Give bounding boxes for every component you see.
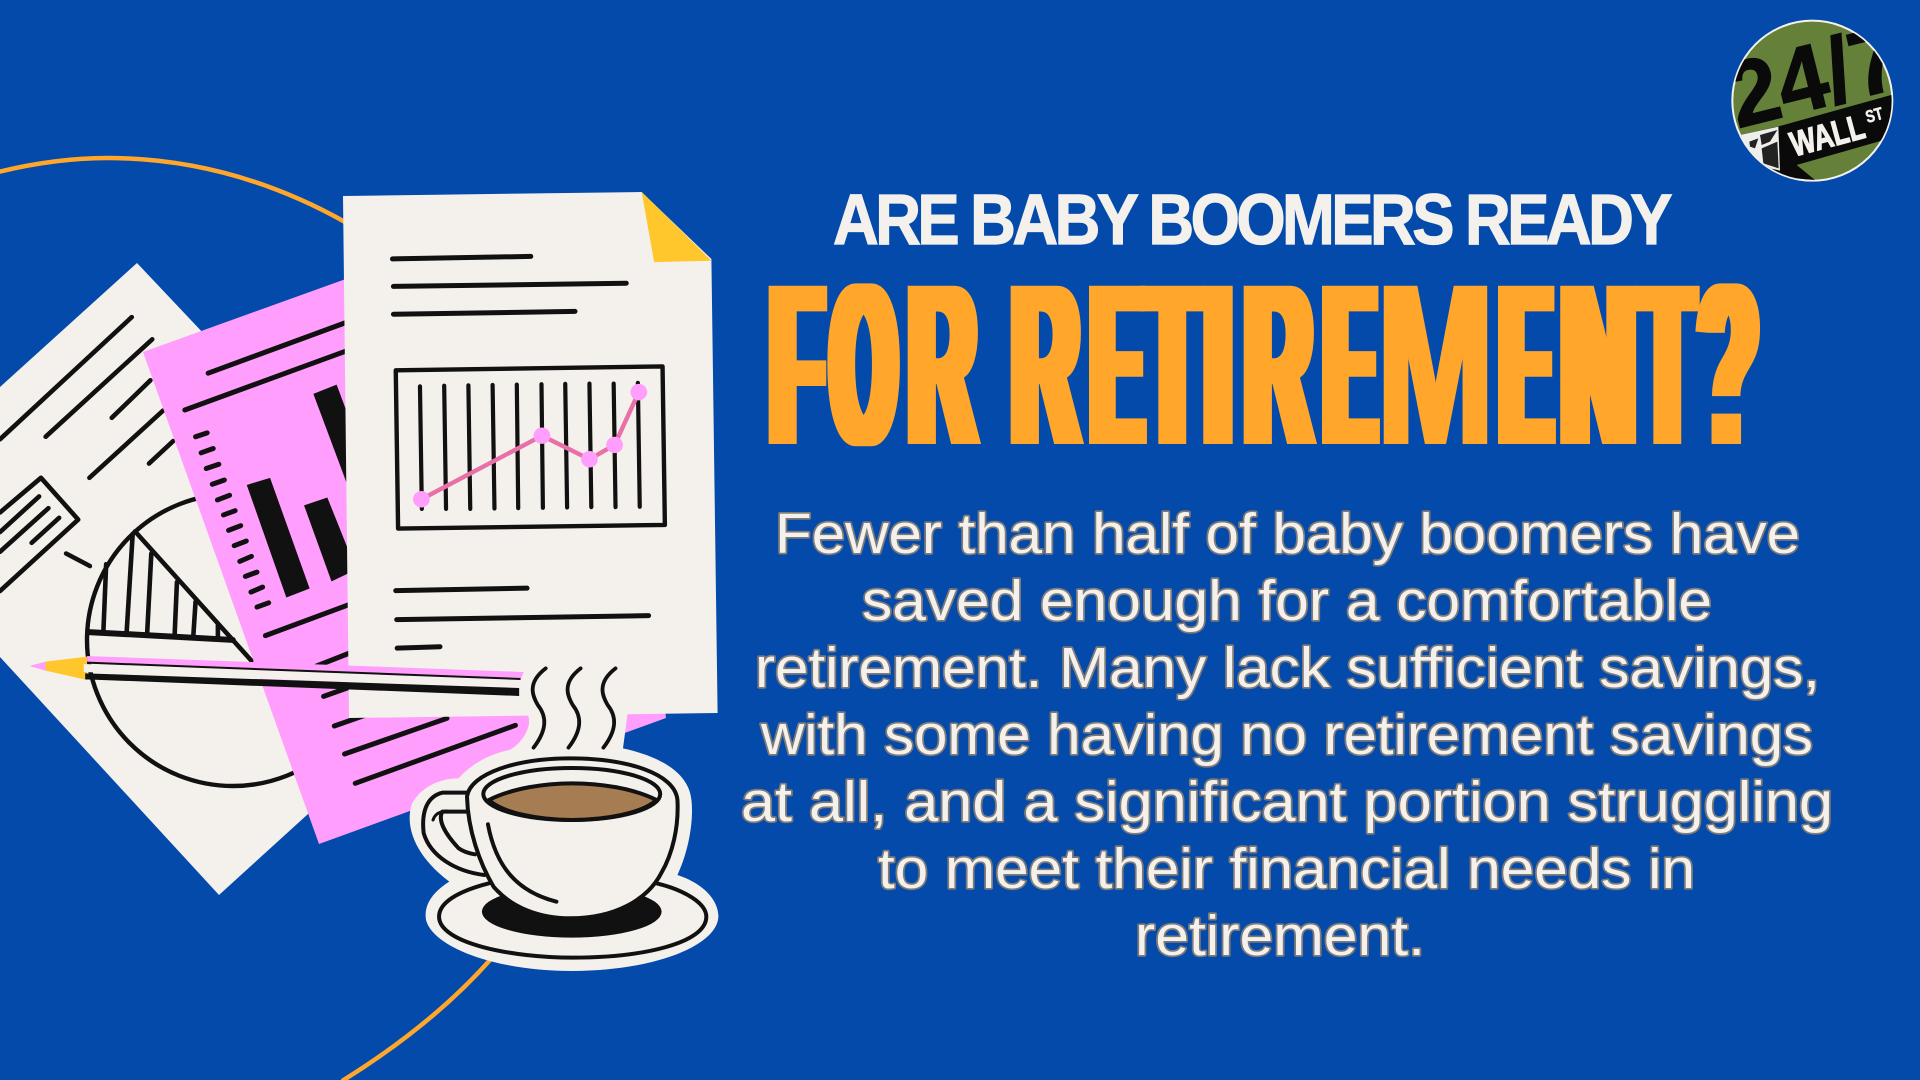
logo: 24/7 Wall St: ST [1863, 103, 1885, 127]
illustration: coffee cup on saucer [410, 668, 718, 971]
main title: T [1147, 236, 1198, 493]
logo: 24/7 Wall St [1731, 20, 1894, 182]
main title: E [1501, 236, 1551, 493]
body text block [741, 502, 1833, 968]
main title: N [1562, 236, 1634, 493]
illustration: pencil [29, 656, 524, 696]
main title: T [1642, 236, 1692, 493]
main title: F [771, 236, 822, 493]
body text block: at all, and a significant portion struggling [741, 770, 1833, 834]
icon: folded corner [642, 192, 711, 262]
logo: 24/7 Wall St: 24/7 [1717, 5, 1911, 148]
main title: E [1325, 236, 1375, 493]
illustration: pink document with bar chart [143, 200, 666, 844]
body text block: Fewer than half of baby boomers have [775, 502, 1800, 566]
body text block: retirement. [1135, 904, 1425, 968]
illustration: front document with line chart [343, 192, 718, 718]
body text block: saved enough for a comfortable [862, 569, 1712, 633]
main title: I [1206, 236, 1230, 493]
main title: E [1092, 236, 1142, 493]
main title: O [832, 236, 896, 493]
main title: R [909, 236, 975, 493]
logo: 24/7 Wall St: WALL [1786, 108, 1869, 164]
orange arc behind illustration [0, 158, 490, 1080]
line chart [396, 366, 665, 529]
main title: R [1012, 236, 1078, 493]
body text block: to meet their financial needs in [878, 837, 1695, 901]
illustration: back document with pie chart [0, 263, 496, 895]
body text block: with some having no retirement savings [760, 703, 1813, 767]
main title: M [1378, 236, 1493, 493]
main title: ? [1699, 236, 1758, 493]
body text block: retirement. Many lack sufficient savings, [755, 636, 1820, 700]
subheading: ARE BABY BOOMERS READY [833, 181, 1672, 260]
main title: R [1245, 236, 1311, 493]
main title [768, 236, 1760, 493]
